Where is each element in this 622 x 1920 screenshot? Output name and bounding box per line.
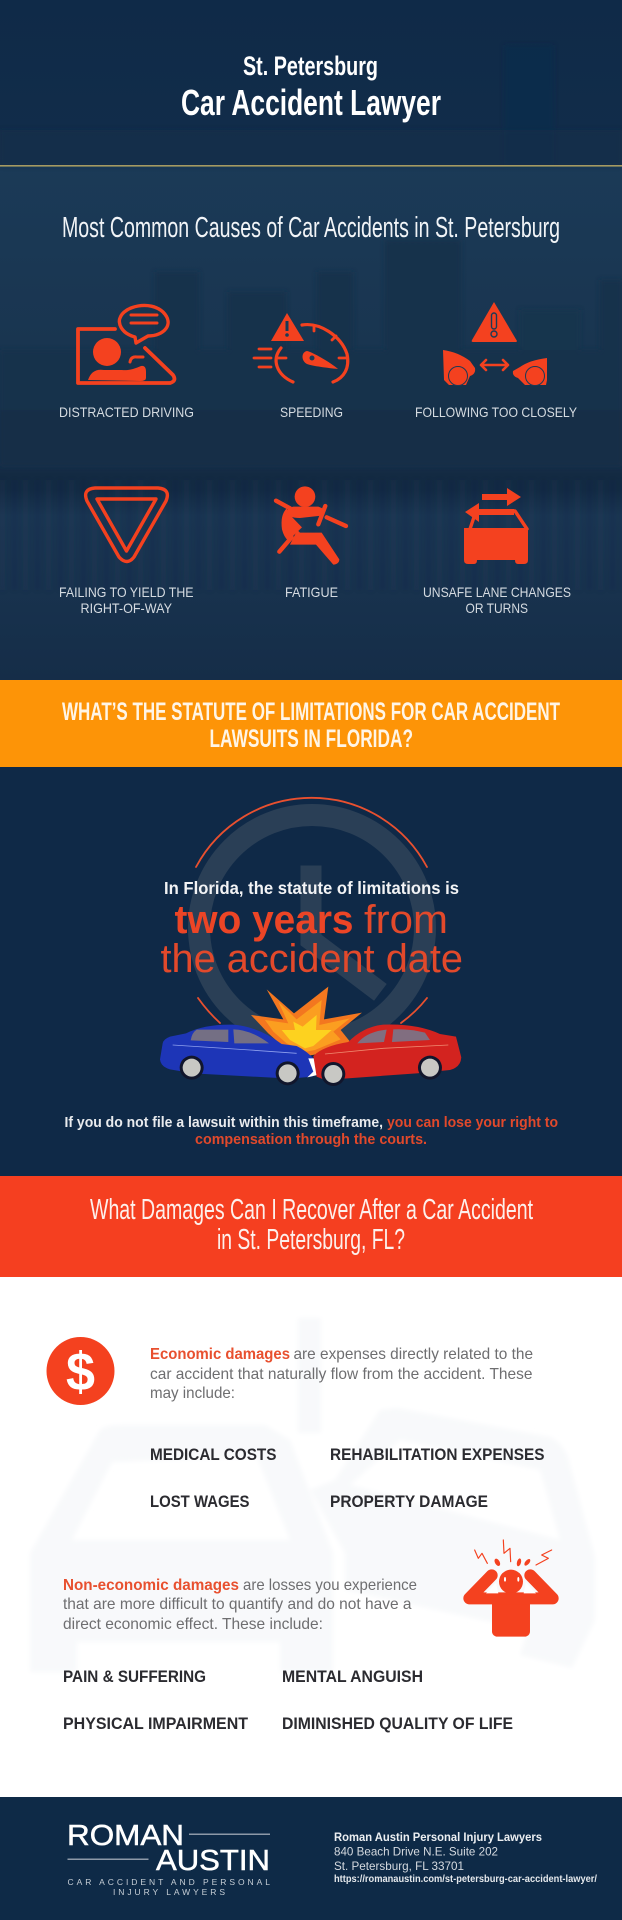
label: speeding: SPEEDING (280, 404, 343, 420)
list: economic damages: LOST WAGES (150, 1493, 250, 1511)
text: consequence note: you can lose your right to (387, 1114, 558, 1131)
label: failing to yield (59, 584, 194, 616)
panel: header and causes background (0, 0, 622, 680)
logo: Roman Austin: AUSTIN (156, 1845, 270, 1877)
title (181, 51, 441, 123)
text: non-economic damages (63, 1577, 417, 1633)
header divider line (0, 165, 622, 167)
text: non-economic damages: that are more difficult to quantify and do not have a (63, 1596, 412, 1613)
icon: speeding (254, 313, 348, 382)
illustration: car crash (160, 987, 461, 1086)
callout: two years from the accident date: two years (174, 898, 354, 942)
title: Car Accident Lawyer (181, 82, 441, 123)
callout: two years from the accident date: the accident date (160, 937, 463, 981)
label: unsafe lane changes (423, 584, 571, 616)
logo: Roman Austin: INJURY LAWYERS (113, 1887, 225, 1897)
text: economic damages: may include: (150, 1385, 235, 1402)
icon: following too closely (443, 302, 547, 386)
title: St. Petersburg (243, 51, 378, 81)
panel: damages section (0, 1277, 622, 1797)
heading: statute of limitations (62, 698, 560, 753)
panel: statute section (0, 767, 622, 1177)
label: unsafe lane changes: OR TURNS (466, 600, 528, 616)
red car (313, 1025, 461, 1086)
text: economic damages: car accident that naturally flow from the accident. These (150, 1366, 533, 1383)
text: contact details: St. Petersburg, FL 33701 (334, 1859, 464, 1873)
blue car (160, 1025, 320, 1085)
text: contact details: https://romanaustin.com/st-petersburg-car-accident-lawyer/ (334, 1874, 597, 1885)
list: non-economic damages: DIMINISHED QUALITY OF LIFE (282, 1715, 513, 1733)
callout: two years from the accident date: from (364, 898, 448, 942)
heading: damages (90, 1194, 533, 1256)
panel: statute heading band (0, 680, 622, 767)
list: economic damages: REHABILITATION EXPENSES (330, 1446, 544, 1464)
text: in Florida: In Florida, the statute of limitations is (164, 878, 459, 898)
label: unsafe lane changes: UNSAFE LANE CHANGES (423, 584, 571, 600)
list: non-economic damages: PAIN & SUFFERING (63, 1668, 206, 1686)
logo: Roman Austin (67, 1820, 270, 1897)
panel: footer (0, 1797, 622, 1920)
text: consequence note: compensation through the courts. (195, 1131, 427, 1148)
icon: dollar: $ (66, 1342, 95, 1402)
explosion (251, 987, 362, 1056)
heading: statute of limitations: LAWSUITS IN FLORIDA? (210, 725, 413, 753)
list: economic damages: PROPERTY DAMAGE (330, 1493, 488, 1511)
heading: damages: in St. Petersburg, FL? (217, 1224, 405, 1256)
text: non-economic damages: direct economic effect. These include: (63, 1616, 323, 1633)
icon: stressed person (469, 1540, 553, 1637)
label: distracted driving: DISTRACTED DRIVING (59, 404, 194, 420)
text: non-economic damages: Non-economic damages (63, 1577, 239, 1594)
icon: dollar (46, 1337, 114, 1405)
list: non-economic damages (63, 1668, 513, 1733)
list: non-economic damages: MENTAL ANGUISH (282, 1668, 423, 1686)
text: non-economic damages: are losses you experience (243, 1577, 417, 1594)
label: following too closely: FOLLOWING TOO CLOSELY (415, 404, 578, 420)
icon: yield sign (86, 488, 167, 562)
icon: distracted driving (78, 305, 174, 383)
text: consequence note: If you do not file a lawsuit within this timeframe, (64, 1114, 383, 1131)
text: contact details (334, 1830, 597, 1885)
label: failing to yield: FAILING TO YIELD THE (59, 584, 194, 600)
icon: fatigue seatbelt (276, 486, 346, 565)
label: fatigue: FATIGUE (285, 584, 338, 600)
text: economic damages: are expenses directly related to the (294, 1346, 533, 1363)
label: failing to yield: RIGHT-OF-WAY (80, 600, 173, 616)
logo: Roman Austin: ROMAN (67, 1820, 184, 1852)
decorative ring arcs (196, 798, 427, 1023)
list: economic damages: MEDICAL COSTS (150, 1446, 276, 1464)
text: contact details: Roman Austin Personal Injury Lawyers (334, 1830, 542, 1844)
panel: damages heading band (0, 1176, 622, 1277)
icon: clock watermark (199, 815, 425, 1041)
text: contact details: 840 Beach Drive N.E. Suite 202 (334, 1844, 498, 1858)
list: non-economic damages: PHYSICAL IMPAIRMENT (63, 1715, 248, 1733)
text: economic damages: Economic damages (150, 1346, 290, 1363)
text: consequence note (64, 1114, 558, 1148)
callout: two years from the accident date (160, 898, 463, 981)
watermark: crashed cars (30, 1318, 595, 1672)
list: economic damages (150, 1446, 544, 1511)
logo: Roman Austin: CAR ACCIDENT AND PERSONAL (68, 1877, 270, 1887)
icon: unsafe lane changes (464, 488, 528, 564)
text: economic damages (150, 1346, 533, 1402)
panel: causes grid (59, 302, 578, 616)
